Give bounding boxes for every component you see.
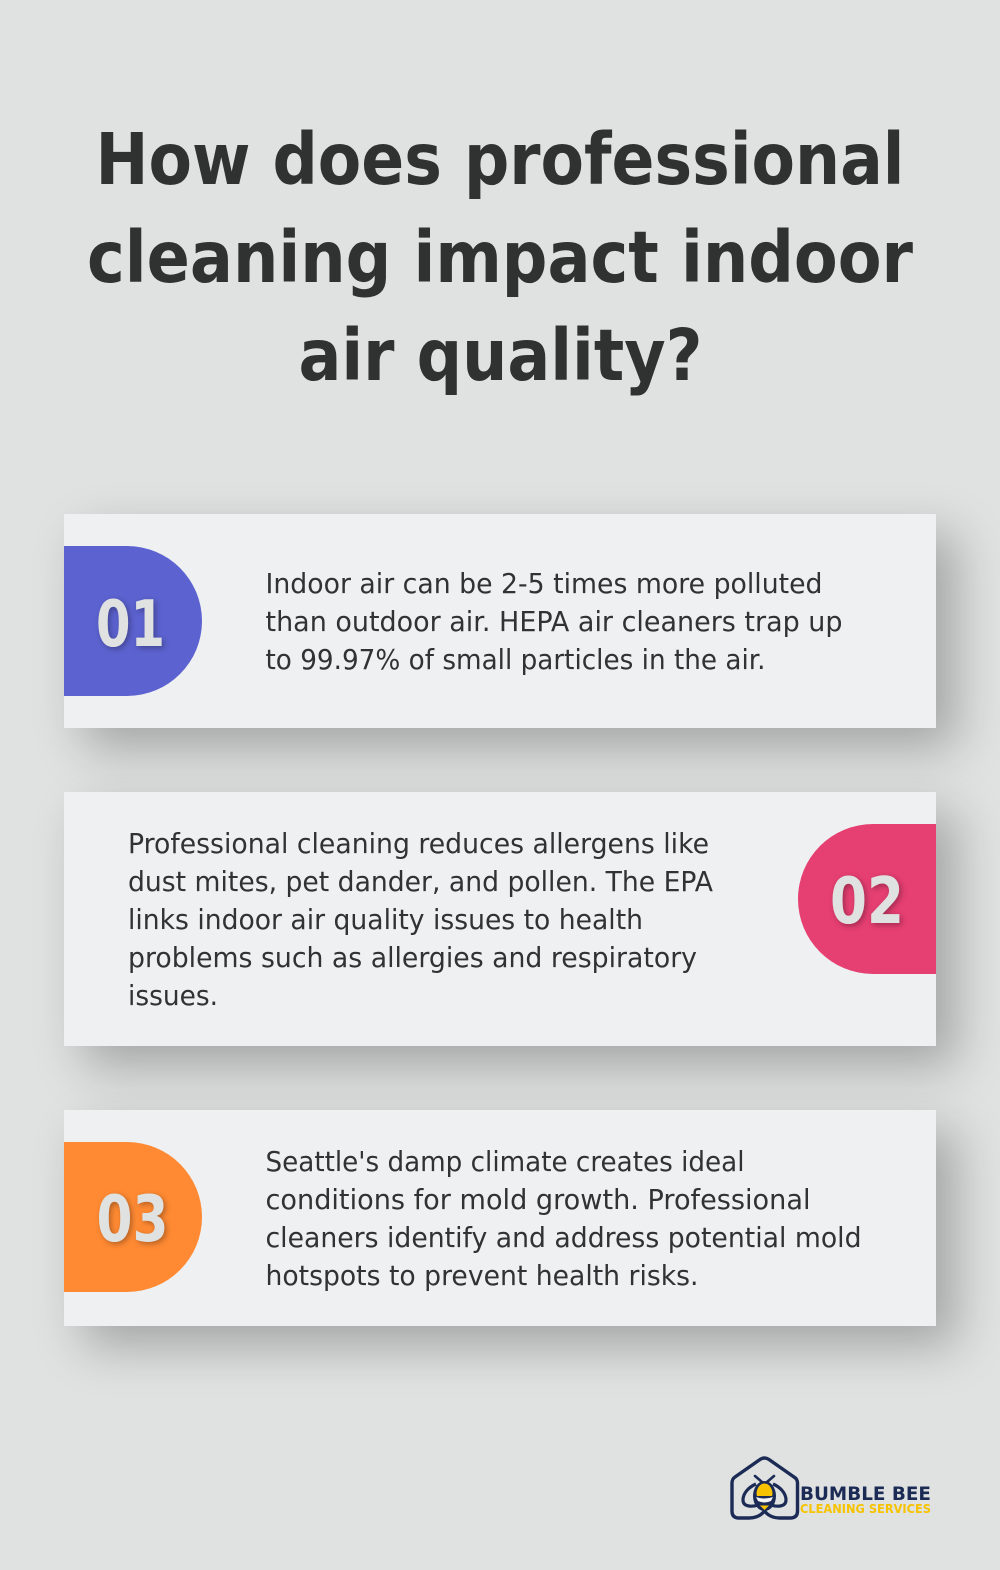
panel: card 01 <box>64 514 936 728</box>
text block: card 01: to 99.97% of small particles in the air. <box>266 644 766 676</box>
text block: card 03: cleaners identify and address potential mold <box>266 1222 862 1254</box>
text block: card 03: Seattle's damp climate creates ideal <box>266 1146 744 1178</box>
title: air quality? <box>298 314 702 397</box>
text block: card 03: hotspots to prevent health risks. <box>266 1260 698 1292</box>
title: How does professional <box>96 118 904 201</box>
text block: card 01: Indoor air can be 2-5 times more polluted <box>266 568 822 600</box>
logo: Bumble Bee Cleaning Services <box>730 1456 931 1520</box>
wordmark: CLEANING SERVICES <box>800 1501 931 1516</box>
text block: card 02: problems such as allergies and respiratory <box>128 942 697 974</box>
title <box>87 118 913 397</box>
wordmark <box>800 1484 931 1516</box>
text block: card 02: issues. <box>128 980 218 1012</box>
number 01: 01 <box>96 588 165 662</box>
text block: card 03: conditions for mold growth. Professional <box>266 1184 810 1216</box>
badge: 01 <box>64 546 202 696</box>
wordmark: BUMBLE BEE <box>800 1484 931 1505</box>
badge: 02 <box>798 824 936 974</box>
icon: house outline with bee <box>732 1458 798 1518</box>
panel: card 02 <box>64 792 936 1046</box>
number 02: 02 <box>830 865 904 939</box>
text block: card 01: than outdoor air. HEPA air cleaners trap up <box>266 606 842 638</box>
text block: card 02: links indoor air quality issues to health <box>128 904 643 936</box>
panel: card 03 <box>64 1110 936 1326</box>
text block: card 02: dust mites, pet dander, and pollen. The EPA <box>128 866 713 898</box>
text block: card 01 <box>266 568 842 676</box>
number 03: 03 <box>96 1183 168 1257</box>
badge: 03 <box>64 1142 202 1292</box>
text block: card 03 <box>266 1146 862 1292</box>
text block: card 02: Professional cleaning reduces allergens like <box>128 828 709 860</box>
title: cleaning impact indoor <box>87 216 913 299</box>
text block: card 02 <box>128 828 713 1012</box>
